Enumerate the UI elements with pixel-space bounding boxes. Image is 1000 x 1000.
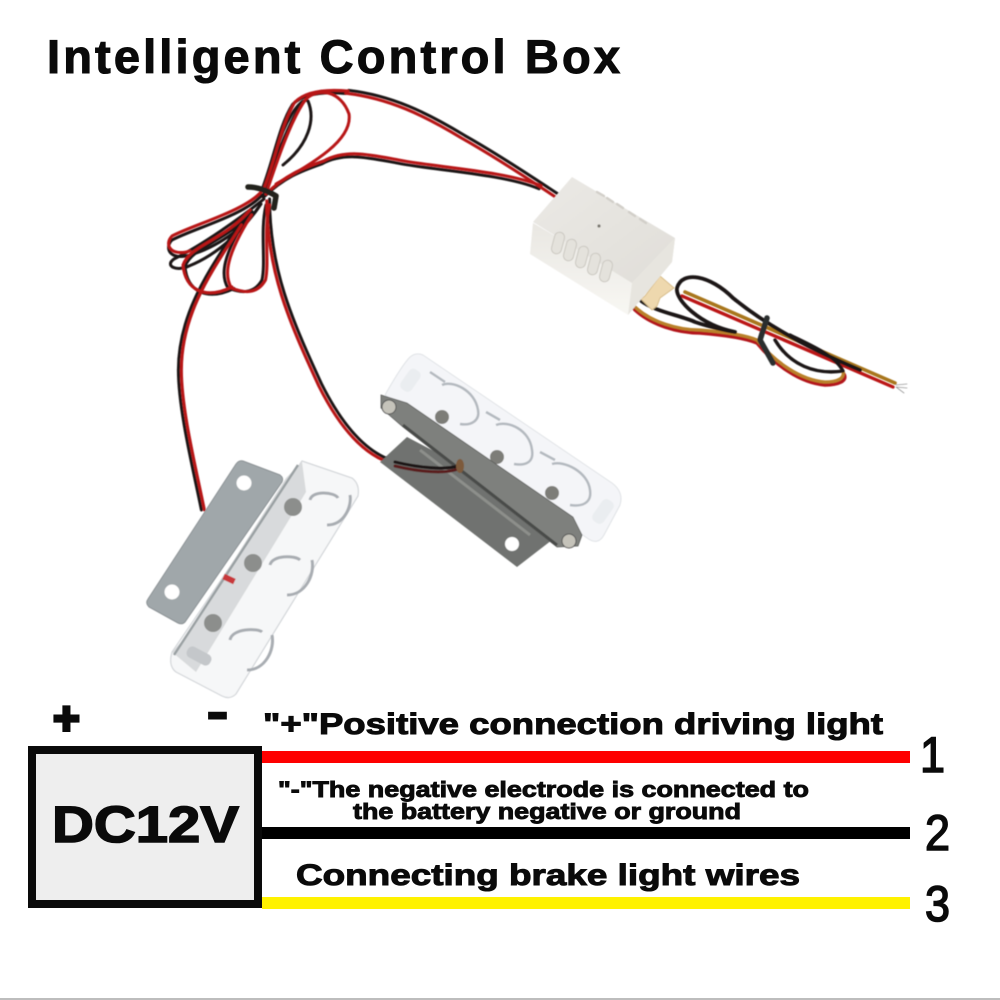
title: Intelligent Control Box [47, 30, 620, 83]
negative electrode label [278, 777, 809, 824]
wire stub entering the right module [395, 462, 458, 472]
red wire [262, 751, 910, 763]
wire bundle from the control box [632, 277, 907, 393]
plus sign: + [53, 692, 80, 744]
mounting tab [641, 276, 674, 310]
red conductors [169, 90, 556, 510]
metal plate [147, 461, 283, 624]
polarity labels [53, 691, 227, 744]
LED module: left [147, 461, 358, 698]
LED module: right [380, 354, 621, 567]
bracket [380, 437, 552, 567]
negative electrode label: the battery negative or ground [353, 799, 741, 824]
wire harness: red and black pair, coiled [169, 90, 559, 510]
negative electrode label: "-"The negative electrode is connected to [278, 777, 809, 802]
DC12V box [32, 750, 258, 904]
vent slots [550, 231, 614, 283]
wire number 3: 3 [925, 876, 950, 932]
DC12V box: DC12V [52, 796, 239, 853]
wire number 1: 1 [920, 727, 945, 783]
black wire [262, 827, 910, 839]
clear lens [385, 354, 621, 541]
positive connection label: "+"Positive connection driving light [263, 708, 883, 741]
black conductors [169, 90, 559, 510]
clear lens [171, 461, 358, 698]
wire number 2: 2 [925, 805, 950, 861]
cable tie [248, 187, 276, 208]
yellow wire [262, 897, 910, 909]
brake light label: Connecting brake light wires [296, 859, 800, 892]
minus sign: - [208, 691, 227, 735]
control box [530, 177, 907, 393]
